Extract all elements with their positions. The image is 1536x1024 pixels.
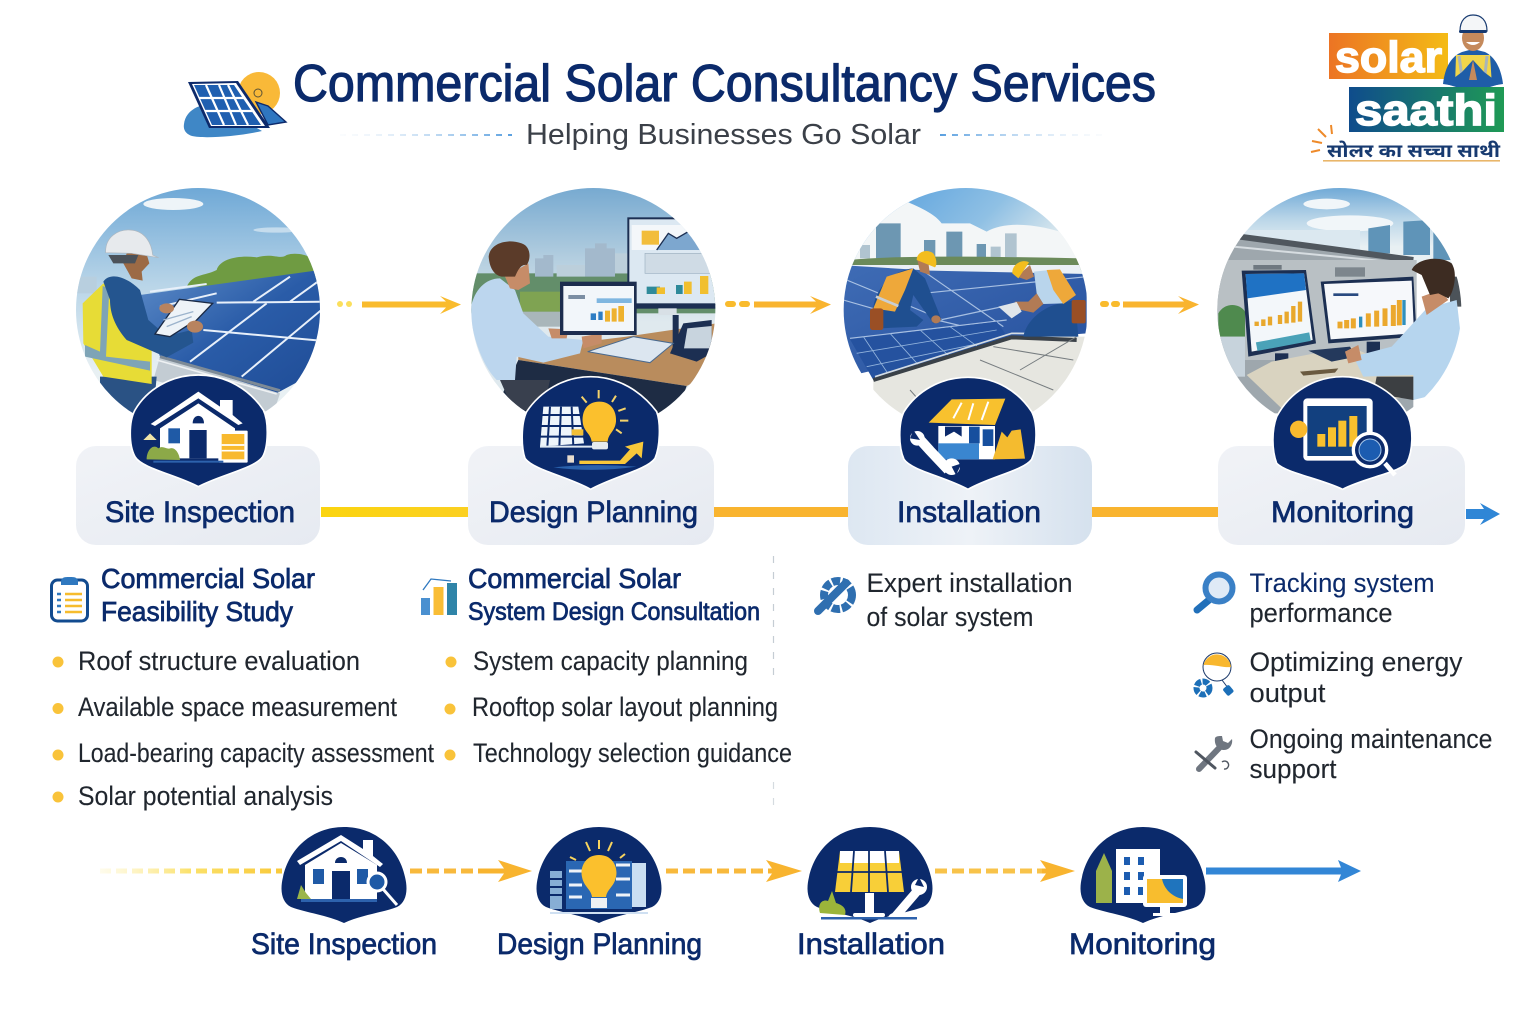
timeline label: design planning: Design Planning bbox=[497, 928, 702, 961]
icon: bulb and gear bbox=[1196, 653, 1234, 696]
divider: column separator lower bbox=[772, 782, 774, 805]
photo: monitoring bbox=[1213, 187, 1467, 413]
timeline label: site inspection: Site Inspection bbox=[251, 928, 437, 961]
logo mascot bbox=[1443, 15, 1503, 87]
title: Commercial Solar Consultancy Services bbox=[293, 55, 1156, 113]
connector: site to design bbox=[321, 507, 468, 517]
checklist: design items bbox=[444, 646, 792, 768]
icon: gear and wrench bbox=[818, 581, 852, 611]
arrow: photo 2 to 3 bbox=[725, 296, 831, 314]
text: tracking bbox=[1250, 568, 1434, 628]
icon badge: monitoring bbox=[1273, 377, 1412, 489]
text: maintenance bbox=[1250, 724, 1492, 784]
logo saathi block: saathi bbox=[1355, 86, 1497, 135]
header logo: solar panel and sun bbox=[184, 72, 286, 137]
timeline badge: monitoring bbox=[1081, 827, 1205, 923]
checklist: feasibility items: Load-bearing capacity assessment bbox=[78, 738, 434, 768]
text: installation: of solar system bbox=[866, 602, 1034, 632]
checklist: design items: Technology selection guidance bbox=[473, 738, 792, 768]
text: installation: Expert installation bbox=[866, 568, 1072, 598]
subtitle: Helping Businesses Go Solar bbox=[526, 119, 921, 151]
label card: installation bbox=[848, 446, 1092, 545]
checklist: feasibility items bbox=[52, 646, 434, 811]
checklist: feasibility items: Roof structure evaluation bbox=[78, 646, 360, 676]
text: maintenance: support bbox=[1250, 754, 1337, 784]
icon: clipboard bbox=[52, 577, 88, 621]
heading: feasibility study: Feasibility Study bbox=[101, 596, 293, 627]
timeline arrow: monitoring exit bbox=[1206, 860, 1361, 882]
logo underline bbox=[1323, 160, 1500, 162]
connector: design to installation bbox=[714, 507, 848, 517]
timeline label: monitoring: Monitoring bbox=[1069, 928, 1216, 961]
text: tracking: Tracking system bbox=[1250, 568, 1434, 598]
icon badge: installation bbox=[900, 377, 1036, 489]
timeline arrow: installation to monitoring bbox=[935, 860, 1075, 882]
text: installation bbox=[866, 568, 1072, 632]
icon: bar chart bbox=[421, 579, 457, 615]
checklist: design items: System capacity planning bbox=[473, 646, 748, 676]
photo: design planning bbox=[471, 188, 716, 414]
heading: system design bbox=[468, 563, 760, 626]
timeline badge: installation bbox=[808, 827, 932, 925]
label: site inspection: Site Inspection bbox=[105, 496, 295, 529]
text: tracking: performance bbox=[1250, 598, 1392, 628]
text: optimizing: output bbox=[1250, 678, 1326, 708]
checklist: feasibility items: Solar potential analysis bbox=[78, 781, 333, 811]
text: optimizing: Optimizing energy bbox=[1250, 647, 1463, 677]
brand logo: solar saathi bbox=[1311, 15, 1504, 165]
label card: monitoring bbox=[1218, 446, 1465, 545]
photo: site inspection bbox=[76, 188, 320, 413]
timeline arrow: design to installation bbox=[666, 860, 802, 882]
timeline label: installation: Installation bbox=[797, 928, 945, 961]
logo solar block: solar bbox=[1335, 33, 1442, 82]
arrow: photo 3 to 4 bbox=[1100, 296, 1199, 314]
arrow: photo 1 to 2 bbox=[337, 296, 461, 314]
label: installation: Installation bbox=[897, 496, 1041, 529]
heading: feasibility study bbox=[101, 563, 315, 627]
checklist: feasibility items: Available space measurement bbox=[78, 692, 397, 722]
panel: feasibility study bbox=[52, 563, 434, 811]
photo: installation bbox=[844, 188, 1087, 414]
heading: system design: Commercial Solar bbox=[468, 563, 681, 594]
label card: site inspection bbox=[76, 446, 320, 545]
logo hindi tagline: सोलर का सच्चा साथी bbox=[1327, 141, 1501, 165]
icon badge: design planning bbox=[522, 377, 659, 489]
logo sun rays bbox=[1311, 125, 1332, 152]
icon: crossed tools bbox=[1196, 736, 1232, 769]
heading: feasibility study: Commercial Solar bbox=[101, 563, 315, 594]
text: maintenance: Ongoing maintenance bbox=[1250, 724, 1492, 754]
subtitle divider right bbox=[940, 134, 1105, 136]
heading: system design: System Design Consultation bbox=[468, 598, 760, 626]
subtitle divider left bbox=[340, 134, 512, 136]
label card: design planning bbox=[468, 446, 714, 545]
label: design planning: Design Planning bbox=[489, 496, 698, 529]
timeline badge: site inspection bbox=[282, 827, 406, 923]
arrow: exit from monitoring bbox=[1466, 503, 1500, 525]
timeline badge: design planning bbox=[537, 827, 661, 923]
timeline arrow: site to design bbox=[410, 860, 532, 882]
icon: magnifier bbox=[1197, 574, 1232, 610]
connector: installation to monitoring bbox=[1092, 507, 1218, 517]
text: optimizing bbox=[1250, 647, 1463, 708]
label: monitoring: Monitoring bbox=[1271, 496, 1414, 529]
timeline: lead-in dashes bbox=[100, 868, 282, 874]
panel: system design consultation bbox=[421, 563, 792, 768]
divider: column separator upper bbox=[772, 556, 774, 680]
checklist: design items: Rooftop solar layout planning bbox=[472, 692, 778, 722]
panel: monitoring details bbox=[1196, 568, 1492, 784]
panel: installation details bbox=[818, 568, 1072, 632]
icon badge: site inspection bbox=[130, 375, 267, 487]
